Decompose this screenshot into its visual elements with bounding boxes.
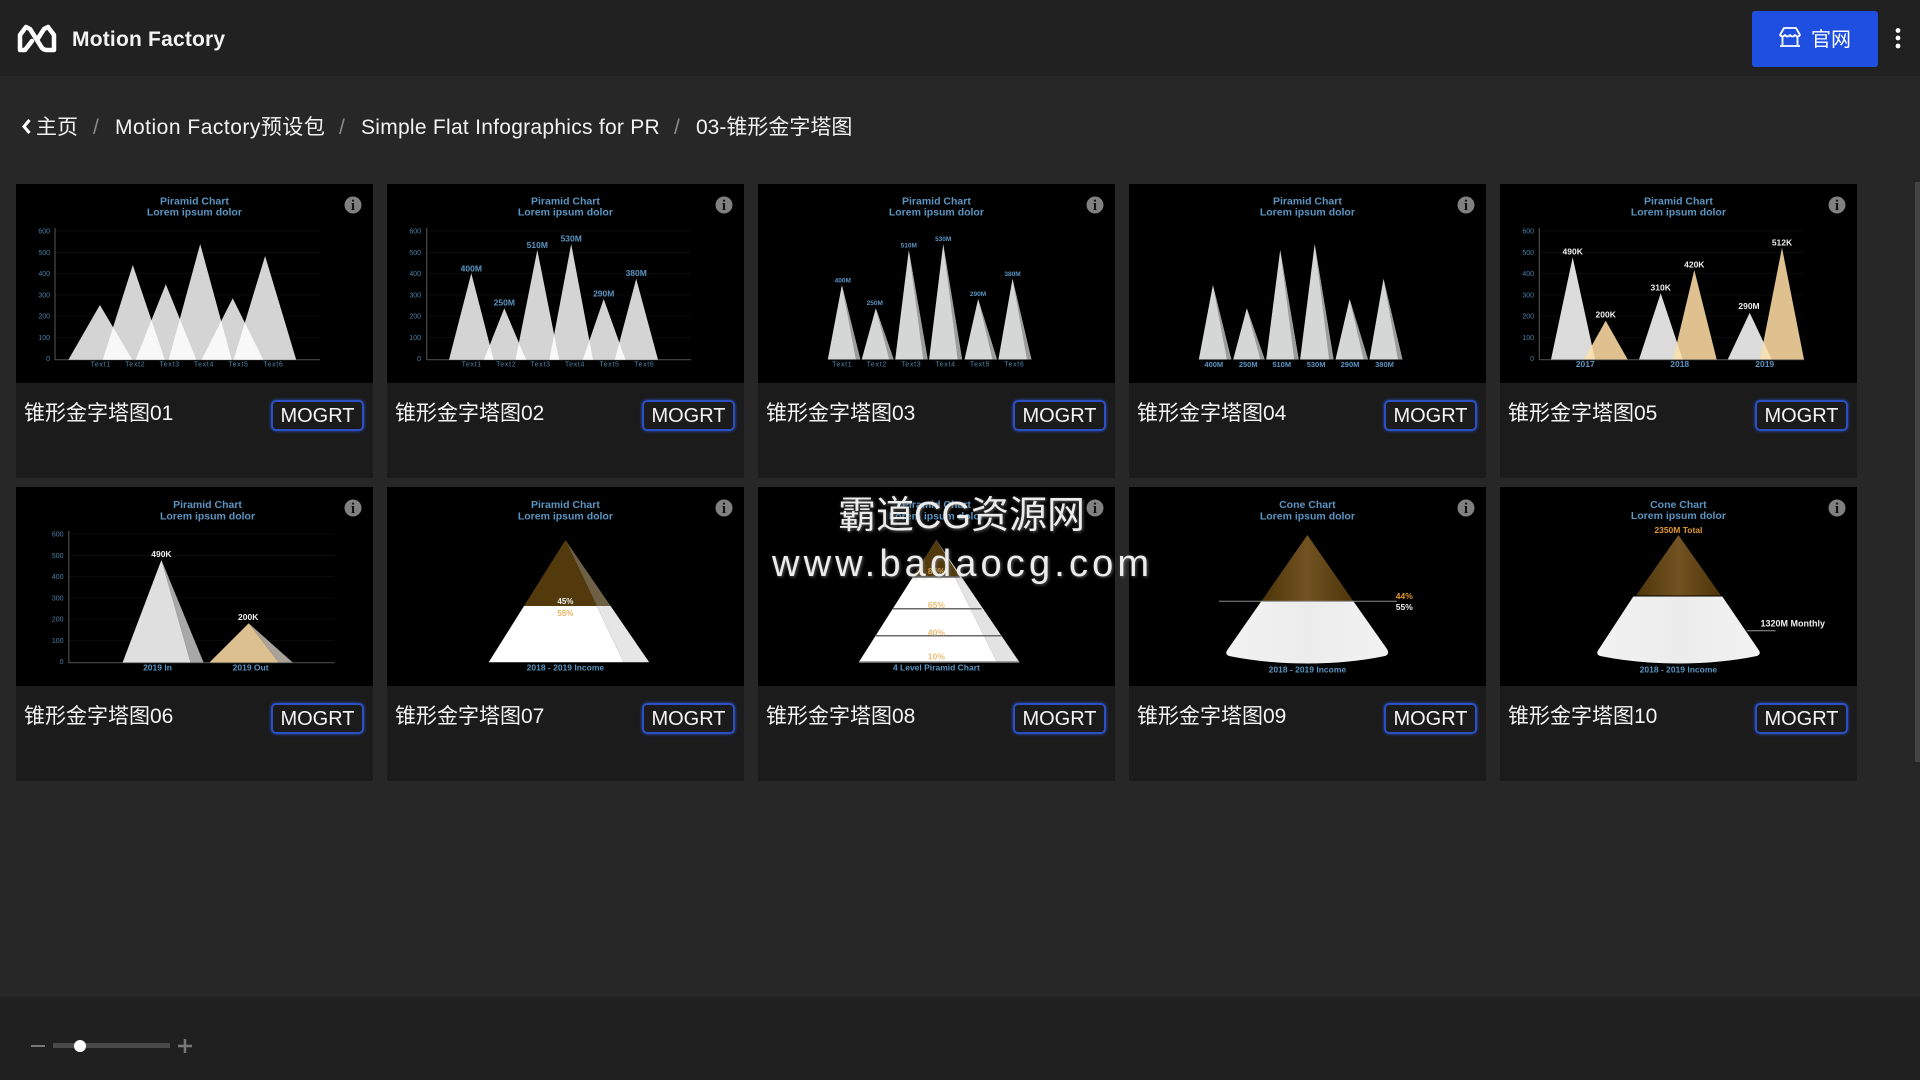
chart: separate shaded pyramids: Text6	[1004, 362, 1025, 368]
card title: 锥形金字塔图01	[24, 402, 173, 425]
chart: pyramids with value labels	[387, 184, 744, 383]
chart: overlapping pyramids with axis: Text4	[194, 362, 214, 368]
card title: 锥形金字塔图03	[766, 402, 915, 425]
chart: separate shaded pyramids: 380M	[1004, 271, 1021, 278]
card title: 锥形金字塔图09	[1137, 705, 1286, 728]
chart: separate shaded pyramids	[758, 184, 1115, 383]
chart: pyramids with value labels: Text4	[565, 362, 585, 368]
chart: separate shaded pyramids: Piramid Chart	[902, 196, 971, 208]
chart: pyramids with value labels: Text6	[634, 362, 655, 368]
chart: separate shaded pyramids: 510M	[901, 242, 917, 250]
chart: overlapping pyramids with axis: Text6	[263, 362, 284, 368]
chart: two 3D pyramids with axis: 490K	[151, 549, 172, 559]
chart: two 3D pyramids with axis: 400	[52, 574, 64, 581]
chart: two-level pyramid	[387, 487, 744, 686]
chart: paired pyramids by year: 512K	[1772, 237, 1793, 247]
card title: 锥形金字塔图02	[395, 402, 544, 425]
chart: pyramids with value labels: i	[722, 198, 726, 214]
chart: paired pyramids by year: 400	[1522, 271, 1534, 278]
chart: paired pyramids by year: 290M	[1738, 301, 1760, 311]
chart: paired pyramids by year: 2017	[1576, 359, 1595, 369]
chart: separate shaded pyramids: Text5	[970, 362, 990, 368]
zoom slider knob	[74, 1040, 86, 1052]
chart: four-level pyramid: 40%	[928, 627, 945, 637]
chart: overlapping pyramids with axis: 300	[38, 292, 50, 300]
chart: pyramids with value labels: Text5	[599, 362, 620, 368]
breadcrumb: current page: 03-锥形金字塔图	[696, 116, 852, 139]
panel: card 03	[758, 184, 1115, 478]
button: MOGRT	[1013, 703, 1106, 734]
chart: separate shaded pyramids: i	[1093, 198, 1097, 214]
chart: two 3D pyramids with axis: 500	[52, 553, 64, 560]
chart: pyramids with value labels: 400	[409, 271, 421, 278]
chart: four-level pyramid: Piramid Chart	[902, 499, 971, 511]
chart: cone with percentages: 55%	[1396, 602, 1413, 612]
chart: separate shaded pyramids: Text1	[832, 362, 852, 368]
chart: pyramids with value labels: 300	[409, 292, 421, 300]
chart: pyramids with value labels: Text2	[496, 362, 516, 368]
chart: pyramids with value labels: Text1	[462, 362, 482, 368]
chart: four-level pyramid: 85%	[928, 566, 945, 576]
chart: four-level pyramid: 65%	[928, 600, 945, 610]
chart: pyramids with value labels: 500	[409, 250, 421, 257]
chart: overlapping pyramids with axis: 0	[46, 356, 50, 363]
chart: overlapping pyramids with axis: Lorem ipsum dolor	[147, 207, 242, 219]
chart: cone with percentages: Cone Chart	[1279, 499, 1336, 511]
chart: pyramids with value labels: 530M	[561, 234, 582, 244]
button: MOGRT: MOGRT	[1764, 708, 1839, 730]
chart: two-level pyramid: Lorem ipsum dolor	[518, 510, 613, 522]
chart: cone with total and monthly callouts: 2018 - 2019 Income	[1640, 664, 1717, 674]
chart: overlapping pyramids with axis: Text1	[91, 362, 111, 368]
watermark: site name: 霸道CG资源网	[838, 495, 1085, 537]
chart: paired pyramids by year: 300	[1522, 292, 1534, 300]
zoom slider track	[53, 1043, 170, 1048]
card title: 锥形金字塔图10	[1508, 705, 1657, 728]
panel: card 09	[1129, 487, 1486, 781]
chart: two 3D pyramids with axis: 2019 Out	[233, 662, 269, 672]
chart: paired pyramids by year: 600	[1522, 228, 1534, 236]
chart: paired pyramids by year: 500	[1522, 250, 1534, 257]
chart: two 3D pyramids with axis: 0	[60, 659, 64, 666]
chart: cone with percentages: 44%	[1396, 591, 1413, 601]
chart: pyramids with value labels: Lorem ipsum dolor	[518, 207, 613, 219]
chart: paired pyramids by year: Lorem ipsum dolor	[1631, 207, 1726, 219]
card title: 锥形金字塔图04	[1137, 402, 1286, 425]
chart: overlapping pyramids with axis: 100	[38, 335, 50, 342]
chart: two 3D pyramids with axis	[16, 487, 373, 686]
chart: overlapping pyramids with axis: 200	[38, 314, 50, 320]
panel: card 06	[16, 487, 373, 781]
panel: card 08	[758, 487, 1115, 781]
chart: shaded pyramids with bottom labels: 290M	[1341, 360, 1359, 369]
chart: shaded pyramids with bottom labels: Piramid Chart	[1273, 196, 1342, 208]
chart: paired pyramids by year: 2018	[1670, 359, 1689, 369]
chart: separate shaded pyramids: 290M	[970, 291, 986, 298]
footer bar	[0, 997, 1920, 1080]
chart: cone with percentages: 2018 - 2019 Income	[1269, 664, 1346, 674]
chart: pyramids with value labels: 380M	[626, 268, 647, 278]
button: MOGRT	[642, 703, 735, 734]
chart: paired pyramids by year: 2019	[1755, 359, 1774, 369]
breadcrumb: presets: Motion Factory预设包	[115, 116, 325, 139]
chart: cone with total and monthly callouts: 1320M Monthly	[1760, 619, 1825, 629]
chart: four-level pyramid	[758, 487, 1115, 686]
breadcrumb separator: /	[93, 116, 99, 139]
breadcrumb separator: /	[339, 116, 345, 139]
watermark	[772, 495, 1153, 587]
chart: two 3D pyramids with axis: 200K	[238, 612, 259, 622]
chart: two-level pyramid: 2018 - 2019 Income	[527, 662, 604, 672]
chart: cone with percentages: i	[1464, 501, 1468, 517]
icon: Motion Factory logo	[18, 24, 56, 52]
chart: separate shaded pyramids: 400M	[835, 278, 851, 284]
chart: paired pyramids by year: Piramid Chart	[1644, 196, 1713, 208]
button: MOGRT: MOGRT	[651, 405, 726, 427]
scrollbar	[1915, 182, 1920, 762]
chart: four-level pyramid: i	[1093, 501, 1097, 517]
chart: paired pyramids by year: 0	[1530, 356, 1534, 363]
chart: two 3D pyramids with axis: 600	[52, 532, 64, 538]
chart: overlapping pyramids with axis: Text5	[228, 362, 249, 368]
chart: overlapping pyramids with axis: Text2	[125, 362, 145, 368]
chart: pyramids with value labels: 600	[409, 228, 421, 236]
button: MOGRT	[1013, 400, 1106, 431]
chart: four-level pyramid: 4 Level Piramid Chart	[893, 662, 980, 672]
icon: zoom in	[178, 1039, 192, 1053]
button: MOGRT	[1755, 400, 1848, 431]
icon: back chevron	[22, 119, 31, 134]
button: MOGRT	[1755, 703, 1848, 734]
breadcrumb: home: 主页	[36, 116, 78, 139]
chart: shaded pyramids with bottom labels: 530M	[1307, 360, 1325, 369]
chart: two-level pyramid: 45%	[557, 597, 573, 606]
button label: 官网	[1811, 29, 1851, 51]
chart: cone with percentages: Lorem ipsum dolor	[1260, 510, 1355, 522]
chart: separate shaded pyramids: 530M	[935, 236, 951, 243]
chart: cone with total and monthly callouts	[1500, 487, 1857, 686]
chart: shaded pyramids with bottom labels: 380M	[1375, 360, 1394, 369]
chart: overlapping pyramids with axis: 400	[38, 271, 50, 278]
breadcrumb separator: /	[674, 116, 680, 139]
chart: two 3D pyramids with axis: Lorem ipsum dolor	[160, 510, 255, 522]
chart: pyramids with value labels: Piramid Chart	[531, 196, 600, 208]
card title: 锥形金字塔图05	[1508, 402, 1657, 425]
card title: 锥形金字塔图07	[395, 705, 544, 728]
chart: paired pyramids by year: i	[1835, 198, 1839, 214]
chart: two 3D pyramids with axis: 200	[52, 616, 64, 624]
chart: shaded pyramids with bottom labels: 510M	[1272, 360, 1291, 369]
official site button	[1752, 11, 1878, 67]
chart: separate shaded pyramids: 250M	[867, 300, 883, 307]
icon: zoom out	[31, 1045, 45, 1047]
breadcrumb: pack: Simple Flat Infographics for PR	[361, 116, 660, 139]
chart: shaded pyramids with bottom labels	[1129, 184, 1486, 383]
button: MOGRT: MOGRT	[651, 708, 726, 730]
icon: more menu dots	[1896, 28, 1900, 48]
chart: cone with total and monthly callouts: 2350M Total	[1654, 525, 1702, 535]
chart: cone with total and monthly callouts: Lorem ipsum dolor	[1631, 510, 1726, 522]
chart: pyramids with value labels: 100	[409, 335, 421, 342]
button: MOGRT: MOGRT	[1393, 708, 1468, 730]
button: MOGRT	[642, 400, 735, 431]
chart: cone with total and monthly callouts: i	[1835, 501, 1839, 517]
breadcrumb	[22, 116, 852, 139]
button: MOGRT	[271, 703, 364, 734]
chart: separate shaded pyramids: Text3	[901, 362, 921, 368]
chart: overlapping pyramids with axis: Text3	[159, 362, 180, 368]
chart: paired pyramids by year: 420K	[1684, 259, 1705, 269]
chart: overlapping pyramids with axis	[16, 184, 373, 383]
panel: card 04	[1129, 184, 1486, 478]
header bar	[0, 0, 1920, 76]
chart: pyramids with value labels: 0	[417, 356, 421, 363]
chart: cone with total and monthly callouts: Cone Chart	[1650, 499, 1707, 511]
button: MOGRT	[1384, 703, 1477, 734]
chart: paired pyramids by year	[1500, 184, 1857, 383]
chart: pyramids with value labels: 200	[409, 314, 421, 320]
card title: 锥形金字塔图08	[766, 705, 915, 728]
chart: shaded pyramids with bottom labels: 400M	[1204, 360, 1223, 369]
button: MOGRT: MOGRT	[1022, 708, 1097, 730]
chart: cone with percentages	[1129, 487, 1486, 686]
chart: four-level pyramid: 10%	[928, 652, 945, 662]
chart: overlapping pyramids with axis: Piramid Chart	[160, 196, 229, 208]
chart: pyramids with value labels: 290M	[593, 288, 614, 298]
brand name: Motion Factory	[72, 28, 225, 51]
panel: card 07	[387, 487, 744, 781]
button: MOGRT: MOGRT	[1764, 405, 1839, 427]
chart: two 3D pyramids with axis: 100	[52, 638, 64, 645]
chart: pyramids with value labels: 400M	[461, 264, 482, 274]
button: MOGRT: MOGRT	[280, 708, 355, 730]
watermark: url: www.badaocg.com	[772, 543, 1153, 585]
panel: card 02	[387, 184, 744, 478]
chart: overlapping pyramids with axis: 600	[38, 228, 50, 236]
chart: overlapping pyramids with axis: 500	[38, 250, 50, 257]
card title: 锥形金字塔图06	[24, 705, 173, 728]
chart: separate shaded pyramids: Text2	[867, 362, 887, 368]
panel: card 01	[16, 184, 373, 478]
chart: shaded pyramids with bottom labels: Lorem ipsum dolor	[1260, 207, 1355, 219]
chart: shaded pyramids with bottom labels: 250M	[1239, 360, 1258, 369]
button: MOGRT: MOGRT	[1022, 405, 1097, 427]
chart: pyramids with value labels: Text3	[530, 362, 551, 368]
chart: two 3D pyramids with axis: i	[351, 501, 355, 517]
chart: four-level pyramid: Lorem ipsum dolor	[889, 510, 984, 522]
chart: paired pyramids by year: 100	[1522, 335, 1534, 342]
chart: pyramids with value labels: 510M	[527, 240, 548, 250]
chart: overlapping pyramids with axis: i	[351, 198, 355, 214]
chart: two 3D pyramids with axis: 300	[52, 596, 64, 602]
panel: card 10	[1500, 487, 1857, 781]
panel: card 05	[1500, 184, 1857, 478]
chart: separate shaded pyramids: Text4	[935, 362, 956, 368]
chart: two 3D pyramids with axis: 2019 In	[143, 662, 172, 672]
chart: two-level pyramid: 55%	[557, 609, 573, 618]
button: MOGRT	[271, 400, 364, 431]
chart: paired pyramids by year: 310K	[1651, 282, 1672, 292]
chart: two-level pyramid: i	[722, 501, 726, 517]
button: MOGRT: MOGRT	[1393, 405, 1468, 427]
chart: shaded pyramids with bottom labels: i	[1464, 198, 1468, 214]
chart: separate shaded pyramids: Lorem ipsum dolor	[889, 207, 984, 219]
chart: paired pyramids by year: 200	[1522, 314, 1534, 320]
chart: two-level pyramid: Piramid Chart	[531, 499, 600, 511]
button: MOGRT	[1384, 400, 1477, 431]
chart: paired pyramids by year: 200K	[1596, 309, 1617, 319]
icon: store	[1779, 27, 1801, 47]
button: MOGRT: MOGRT	[280, 405, 355, 427]
chart: two 3D pyramids with axis: Piramid Chart	[173, 499, 242, 511]
chart: pyramids with value labels: 250M	[494, 298, 515, 308]
chart: paired pyramids by year: 490K	[1563, 247, 1584, 257]
